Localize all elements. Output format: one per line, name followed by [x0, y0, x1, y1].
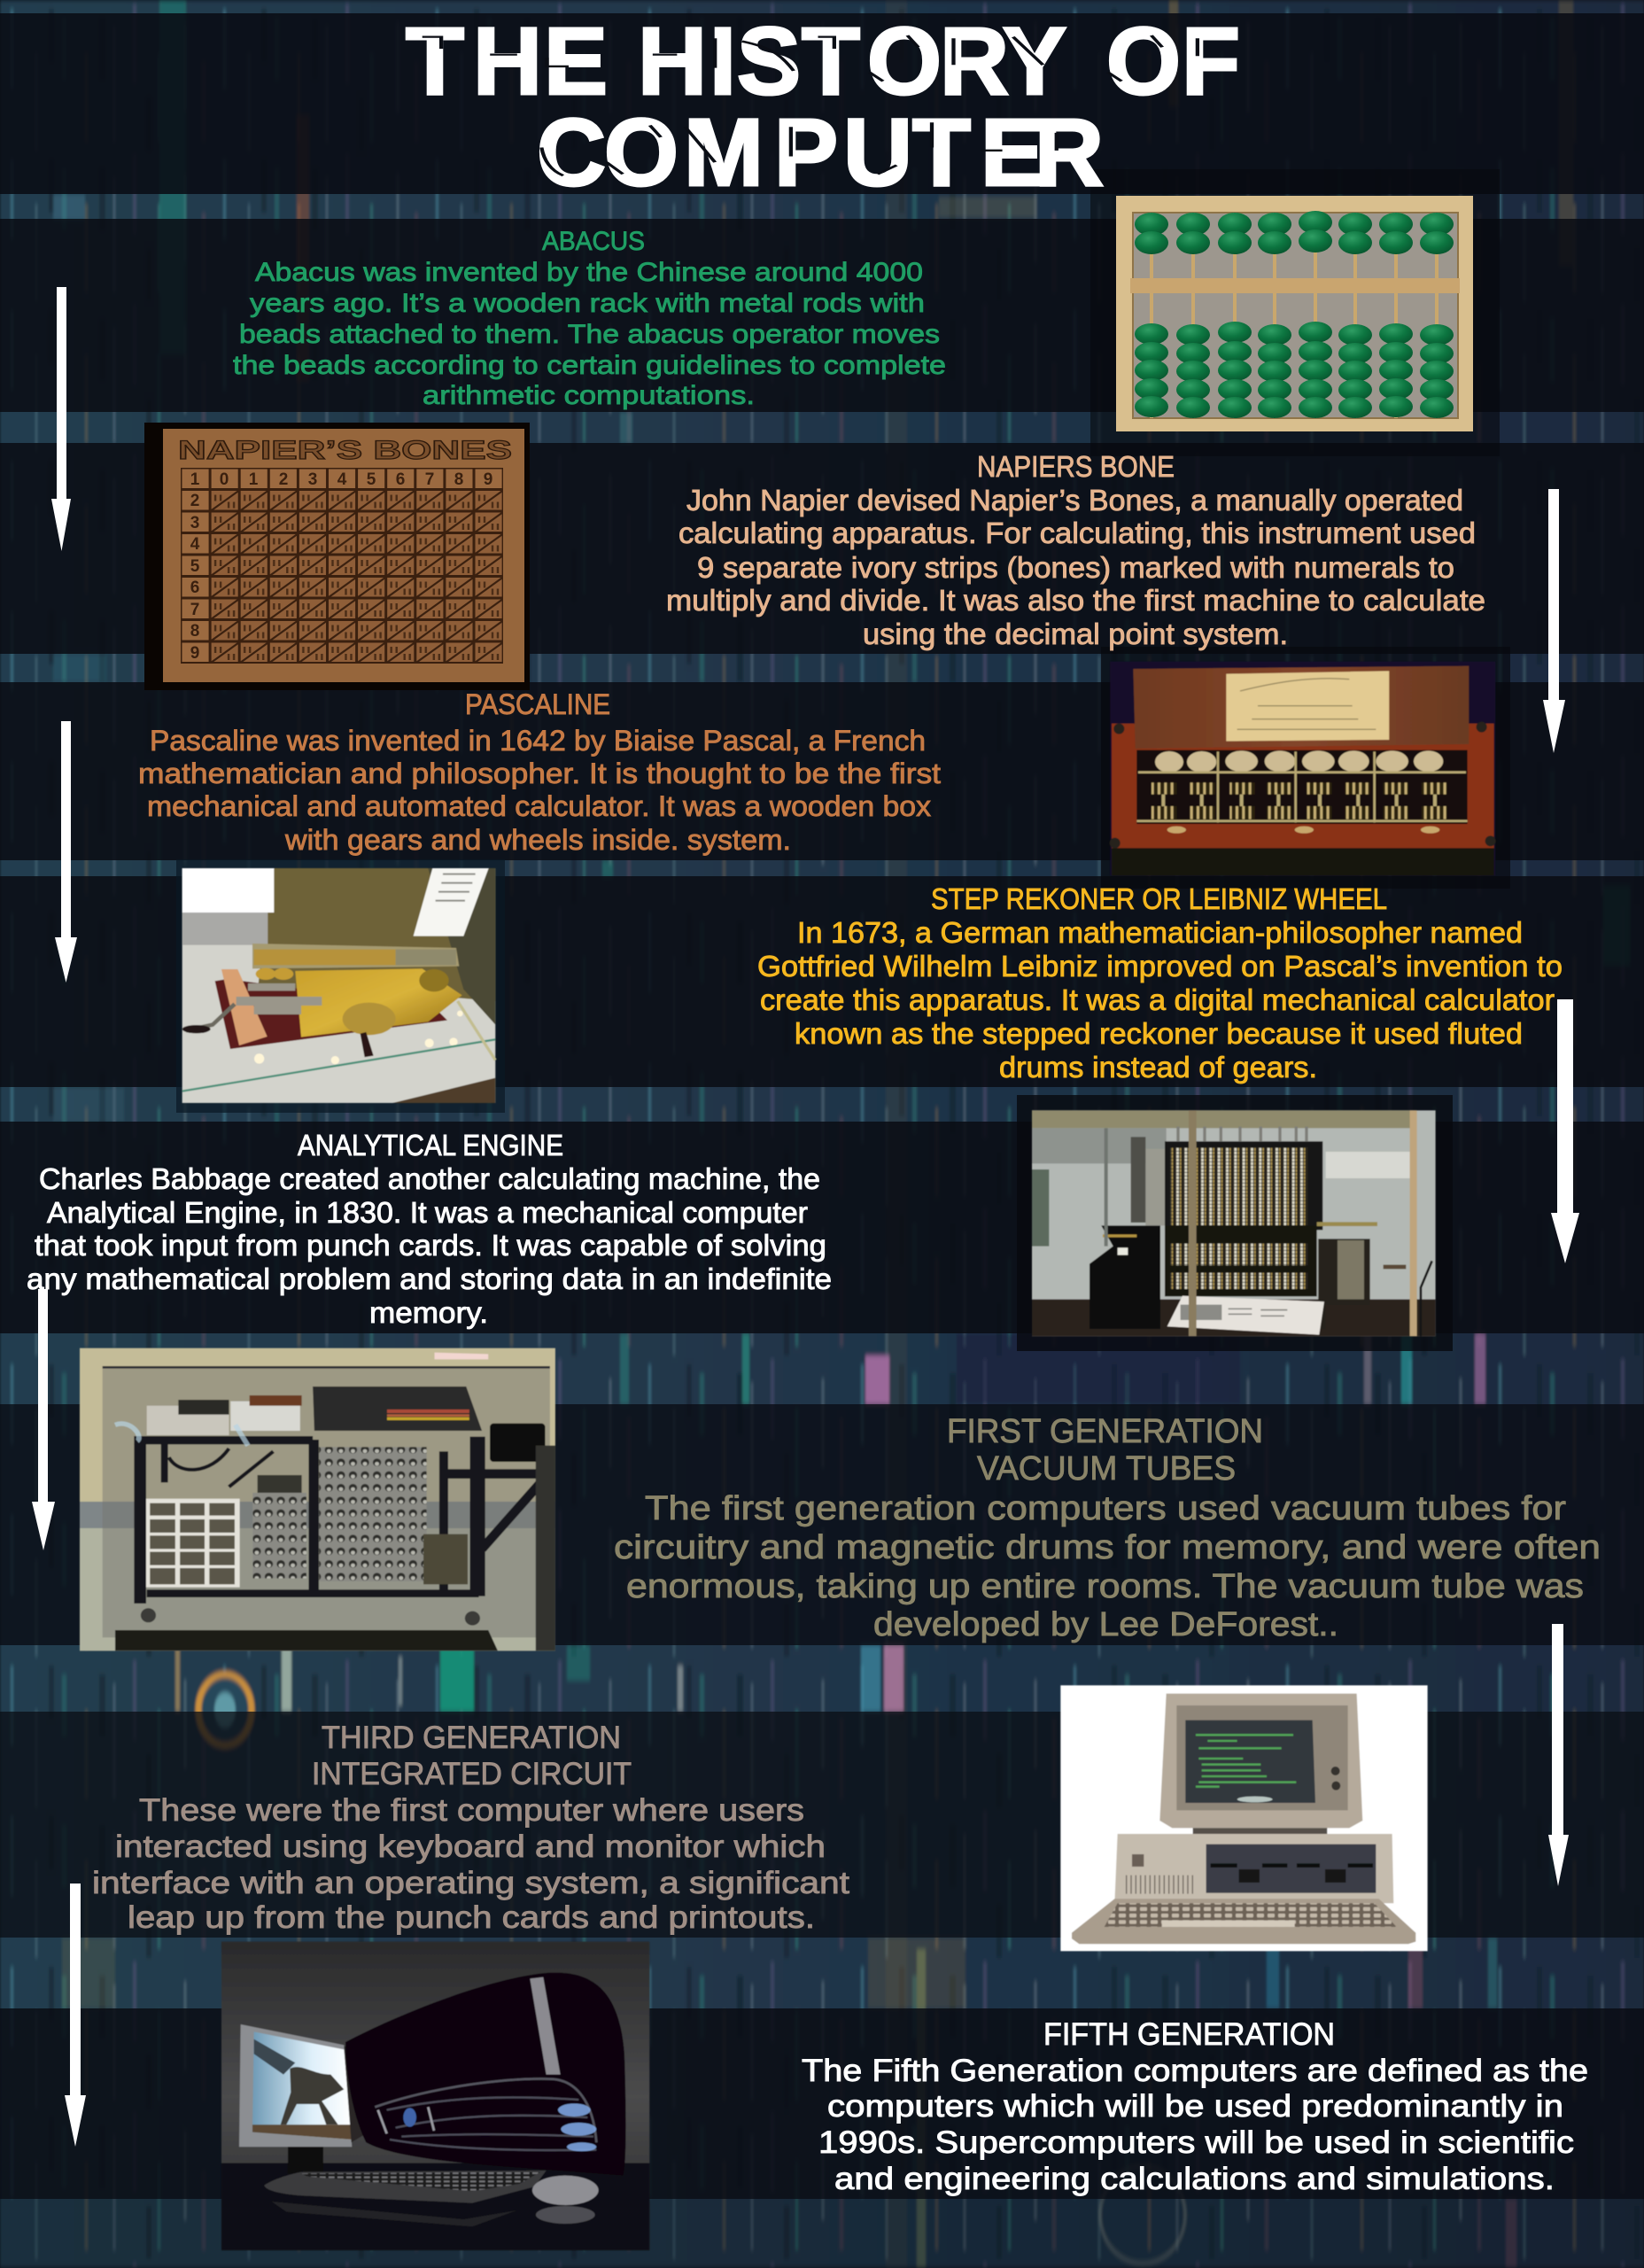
image: napier's bones board: NAPIER’S BONES [178, 436, 512, 465]
arrow [55, 721, 77, 983]
text block: fifth generation [802, 2017, 1588, 2196]
image: napier's bones board: 9 [484, 470, 492, 489]
text block: napiers bone: using the decimal point system. [863, 617, 1288, 650]
text block: pascaline [138, 688, 941, 856]
text block: third generation [92, 1720, 849, 1935]
arrow [1548, 1624, 1569, 1886]
text block: analytical engine: Analytical Engine, in 1830. It was a mechanical computer [47, 1196, 808, 1229]
image backdrops [1090, 169, 1500, 456]
text block: abacus: Abacus was invented by the Chinese around 4000 [255, 258, 923, 287]
text block: third generation: INTEGRATED CIRCUIT [312, 1757, 632, 1791]
section: napiers bone [144, 423, 1565, 753]
text block: pascaline: with gears and wheels inside. system. [284, 824, 791, 856]
image: leibniz wheel machine [182, 868, 495, 1103]
image: napier's bones board: 7 [425, 470, 434, 489]
section: fifth generation [221, 1942, 1588, 2250]
text block: analytical engine: ANALYTICAL ENGINE [298, 1129, 563, 1161]
text block: napiers bone: 9 separate ivory strips (bones) marked with numerals to [697, 551, 1454, 584]
arrow [32, 1289, 55, 1550]
text block: first generation: circuitry and magnetic drums for memory, and were often [614, 1529, 1601, 1566]
image: napier's bones board: 6 [396, 470, 405, 489]
image: napier's bones board: 5 [367, 470, 376, 489]
image: napier's bones board: 3 [190, 514, 199, 532]
text block: analytical engine: Charles Babbage created another calculating machine, the [39, 1162, 820, 1195]
image: napier's bones board: 3 [308, 470, 317, 489]
text block: step rekoner: STEP REKONER OR LEIBNIZ WHEEL [931, 882, 1387, 915]
text block: first generation [614, 1413, 1601, 1643]
image: napier's bones board: 2 [190, 492, 199, 510]
text block: step rekoner [757, 882, 1563, 1084]
section: third generation [65, 1685, 1428, 2147]
text block: pascaline: PASCALINE [465, 688, 610, 720]
text block: napiers bone: John Napier devised Napier’s Bones, a manually operated [686, 484, 1463, 517]
text block: abacus: beads attached to them. The abacus operator moves [239, 320, 940, 349]
image: napier's bones board: 4 [190, 535, 200, 554]
text block: third generation: These were the first computer where users [139, 1793, 804, 1828]
arrow [1551, 999, 1579, 1263]
section: analytical engine [27, 1110, 1436, 1550]
text block: pascaline: Pascaline was invented in 1642 by Biaise Pascal, a French [150, 725, 926, 757]
text block: first generation: developed by Lee DeForest.. [873, 1606, 1338, 1643]
dark band overlays [0, 13, 1644, 194]
image: napier's bones board: 8 [454, 470, 463, 489]
text block: abacus: years ago. It’s a wooden rack with metal rods with [250, 289, 925, 318]
image: modern desktop computer [221, 1942, 649, 2250]
text block: third generation: THIRD GENERATION [322, 1720, 621, 1755]
text block: third generation: leap up from the punch cards and printouts. [128, 1900, 815, 1935]
text block: analytical engine: memory. [369, 1296, 488, 1329]
text block: fifth generation: FIFTH GENERATION [1043, 2017, 1335, 2052]
image: napier's bones board: 8 [190, 622, 199, 641]
text block: first generation: enormous, taking up entire rooms. The vacuum tube was [626, 1568, 1584, 1605]
text block: analytical engine: that took input from punch cards. It was capable of solving [35, 1229, 826, 1262]
text block: first generation: FIRST GENERATION [947, 1413, 1263, 1450]
text block: abacus [233, 227, 946, 410]
text block: napiers bone: calculating apparatus. For calculating, this instrument used [679, 517, 1476, 549]
text block: step rekoner: Gottfried Wilhelm Leibniz improved on Pascal’s invention to [757, 950, 1563, 983]
arrow [51, 287, 71, 551]
text block: pascaline: mathematician and philosopher. It is thought to be the first [138, 757, 941, 789]
image: napier's bones board: 4 [337, 470, 347, 489]
section: first generation [80, 1348, 1601, 1886]
text block: fifth generation: computers which will be used predominantly in [827, 2089, 1563, 2124]
text block: step rekoner: drums instead of gears. [999, 1051, 1317, 1084]
text block: analytical engine: any mathematical problem and storing data in an indefinite [27, 1262, 832, 1295]
image: napier's bones board: 7 [190, 601, 199, 619]
section: step rekoner [182, 868, 1579, 1263]
text block: fifth generation: and engineering calculations and simulations. [834, 2162, 1555, 2196]
text block: third generation: interacted using keyboard and monitor which [115, 1829, 826, 1864]
section: abacus [51, 196, 1473, 551]
image: napier's bones board: 9 [190, 644, 199, 663]
text block: abacus: ABACUS [542, 227, 645, 256]
image: napier's bones board: 1 [249, 470, 259, 489]
text block: fifth generation: The Fifth Generation computers are defined as the [802, 2054, 1588, 2088]
text block: abacus: the beads according to certain guidelines to complete [233, 351, 946, 380]
image: abacus [1116, 196, 1473, 431]
text block: first generation: The first generation computers used vacuum tubes for [645, 1490, 1566, 1527]
image: IBM personal computer [1060, 1685, 1428, 1951]
text block: pascaline: mechanical and automated calculator. It was a wooden box [147, 790, 931, 822]
text block: step rekoner: In 1673, a German mathematician-philosopher named [797, 916, 1523, 949]
title [406, 7, 1240, 206]
image: napier's bones board: 6 [190, 579, 199, 597]
text block: third generation: interface with an operating system, a significant [92, 1866, 849, 1900]
section: pascaline [55, 662, 1496, 983]
image: napier's bones board: 5 [190, 557, 200, 576]
image: napier's bones board: 1 [190, 470, 200, 489]
text block: first generation: VACUUM TUBES [977, 1450, 1236, 1487]
text block: napiers bone: NAPIERS BONE [977, 450, 1175, 483]
text block: fifth generation: 1990s. Supercomputers will be used in scientific [818, 2125, 1574, 2160]
title: COMPUTER [537, 98, 1104, 206]
text block: abacus: arithmetic computations. [423, 381, 755, 410]
text block: step rekoner: create this apparatus. It was a digital mechanical calculator [760, 983, 1555, 1016]
image: difference engine [1032, 1110, 1436, 1336]
text block: napiers bone [666, 450, 1485, 650]
title: THE HISTORY OF [406, 7, 1240, 114]
text block: step rekoner: known as the stepped reckoner because it used fluted [795, 1017, 1523, 1050]
image: napier's bones board [144, 423, 530, 690]
image: vacuum tube computer [80, 1348, 555, 1651]
text block: napiers bone: multiply and divide. It was also the first machine to calculate [666, 584, 1485, 617]
image: napier's bones board: 2 [279, 470, 288, 489]
text block: analytical engine [27, 1129, 832, 1329]
image: napier's bones board: 0 [220, 470, 229, 489]
arrow [1543, 489, 1565, 753]
image: pascaline calculator [1110, 662, 1496, 875]
arrow [65, 1884, 86, 2147]
